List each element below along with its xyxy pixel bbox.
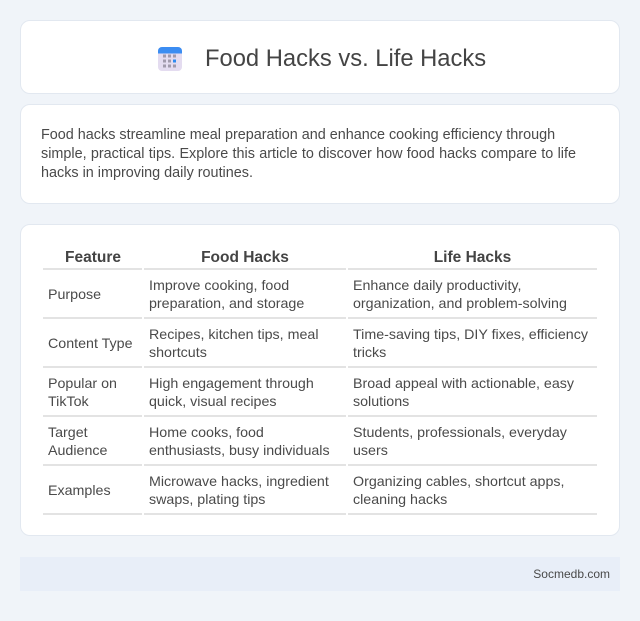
row: purpose: Purpose	[48, 287, 101, 303]
row: examples: Examples	[48, 483, 111, 499]
footer text: Socmedb.com	[533, 567, 610, 581]
row: target audience: Students, professionals, everyday	[353, 425, 567, 441]
header row	[43, 249, 597, 270]
row: content type: Recipes, kitchen tips, meal	[149, 327, 318, 343]
row: target audience: Target	[48, 425, 88, 441]
row: target audience	[43, 425, 597, 466]
row: purpose: Improve cooking, food	[149, 278, 289, 294]
row: content type: tricks	[353, 345, 386, 361]
panel: comparison table	[20, 224, 620, 536]
header row: Food Hacks	[201, 249, 289, 266]
panel: intro text	[20, 104, 620, 204]
row: popular on tiktok	[43, 376, 597, 417]
header row: Feature	[65, 249, 121, 266]
row: purpose: organization, and problem-solving	[353, 296, 567, 312]
row: purpose: preparation, and storage	[149, 296, 304, 312]
intro paragraph: simple, practical tips. Explore this article to discover how food hacks compare to life	[41, 146, 576, 162]
title: Food Hacks vs. Life Hacks	[205, 45, 486, 72]
panel: title card	[20, 20, 620, 94]
row: popular on tiktok: Broad appeal with actionable, easy	[353, 376, 574, 392]
intro paragraph	[41, 127, 576, 181]
row: content type: shortcuts	[149, 345, 207, 361]
footer bar	[20, 557, 620, 591]
row: content type: Content Type	[48, 336, 133, 352]
row: examples: cleaning hacks	[353, 492, 447, 508]
row: examples	[43, 474, 597, 515]
row: examples: Organizing cables, shortcut apps,	[353, 474, 564, 490]
row: target audience: Audience	[48, 443, 107, 459]
row: popular on tiktok: Popular on	[48, 376, 117, 392]
row: purpose	[43, 278, 597, 319]
row: content type: Time-saving tips, DIY fixes, efficiency	[353, 327, 588, 343]
row: content type	[43, 327, 597, 368]
row: examples: Microwave hacks, ingredient	[149, 474, 329, 490]
row: target audience: users	[353, 443, 388, 459]
row: purpose: Enhance daily productivity,	[353, 278, 521, 294]
intro paragraph: hacks in improving daily routines.	[41, 165, 253, 181]
header row: Life Hacks	[434, 249, 511, 266]
icon: calendar	[158, 47, 182, 71]
row: target audience: Home cooks, food	[149, 425, 264, 441]
row: target audience: enthusiasts, busy individuals	[149, 443, 330, 459]
comparison table	[43, 249, 597, 515]
intro paragraph: Food hacks streamline meal preparation and enhance cooking efficiency through	[41, 127, 555, 143]
row: popular on tiktok: solutions	[353, 394, 409, 410]
row: popular on tiktok: High engagement through	[149, 376, 314, 392]
row: examples: swaps, plating tips	[149, 492, 265, 508]
row: popular on tiktok: TikTok	[48, 394, 89, 410]
row: popular on tiktok: quick, visual recipes	[149, 394, 277, 410]
